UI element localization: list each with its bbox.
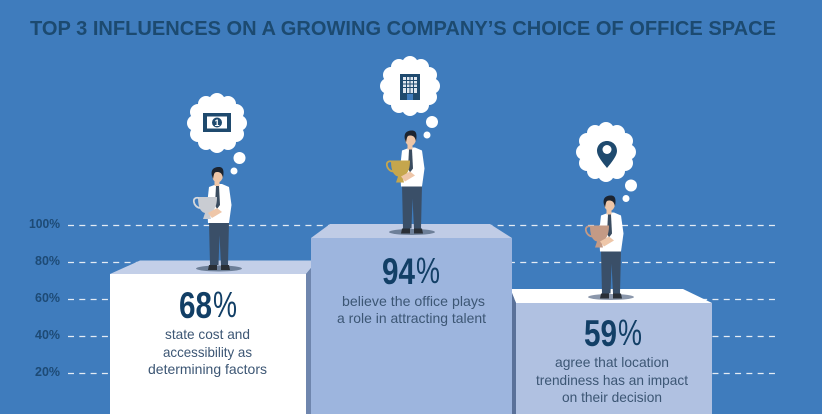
trophy: gold [387, 160, 415, 182]
text: cost and accessibility: determining factors [148, 361, 267, 377]
thought bubble: location [576, 122, 637, 202]
text: cost and accessibility: accessibility as [163, 344, 252, 360]
icon: banknote: 1 [214, 118, 220, 128]
podium: 59% [512, 289, 712, 414]
person with gold trophy [387, 130, 435, 235]
trophy: silver [194, 197, 222, 219]
text: attracting talent: believe the office plays [342, 293, 485, 309]
thought bubble: office building [380, 56, 440, 138]
podium: 94% [311, 224, 512, 414]
stat: 59% [584, 312, 642, 354]
stat: 68%: % [213, 284, 237, 325]
trophy: bronze [586, 226, 614, 248]
text: cost and accessibility: state cost and [165, 326, 250, 342]
person with bronze trophy [586, 196, 634, 300]
text: attracting talent [337, 293, 486, 326]
text: location trendiness [536, 354, 688, 405]
text: location trendiness: on their decision [562, 389, 662, 405]
stat: 94%: 94 [382, 251, 415, 292]
stat: 94% [382, 250, 440, 292]
axis labels: 40% [35, 327, 60, 342]
icon: building [400, 74, 420, 100]
axis labels: 20% [35, 364, 60, 379]
text: cost and accessibility [148, 326, 267, 377]
axis labels: 60% [35, 290, 60, 305]
axis labels: 100% [29, 216, 60, 231]
stat: 94%: % [416, 250, 440, 291]
stat: 68% [179, 284, 237, 326]
person with silver trophy [194, 167, 242, 272]
stat: 59%: 59 [584, 313, 617, 354]
stat: 59%: % [618, 312, 642, 353]
icon: map pin [597, 141, 617, 168]
podium: 68% [110, 260, 311, 414]
stat: 68%: 68 [179, 285, 212, 326]
title: TOP 3 INFLUENCES ON A GROWING COMPANY’S CHOICE OF OFFICE SPACE [30, 18, 776, 40]
text: location trendiness: agree that location [555, 354, 669, 370]
axis labels: 80% [35, 253, 60, 268]
thought bubble: money [187, 93, 247, 174]
axis labels [29, 216, 60, 379]
text: attracting talent: a role in attracting talent [337, 310, 486, 326]
text: location trendiness: trendiness has an impact [536, 372, 688, 388]
